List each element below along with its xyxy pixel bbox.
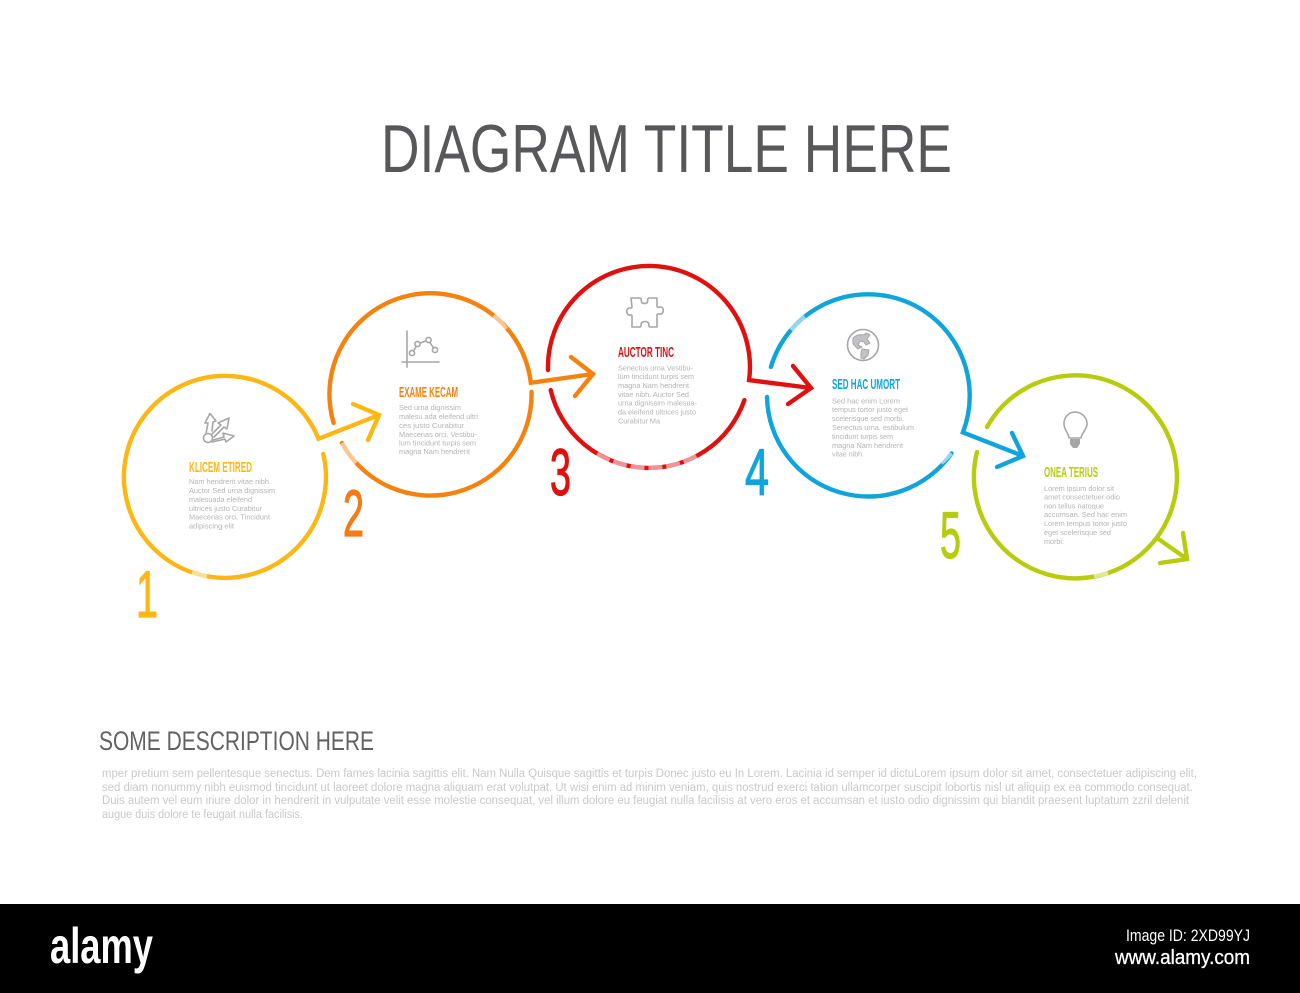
heading: Sed Hac Umort: SED HAC UMORT — [832, 377, 900, 393]
description paragraph: sed diam nonummy nibh euismod tincidunt ut laoreet dolore magna aliquam erat volutpat. Ut wisi enim ad minim veniam, quis nostrud exerci tation ullamcorper suscipit lobortis nisl ut aliquip ex ea commodo consequat. — [102, 782, 1193, 794]
text block: step 3: Curabitur Ma — [618, 416, 661, 426]
text block: step 4 — [832, 396, 914, 458]
description paragraph: Duis autem vel eum iriure dolor in hendrerit in vulputate velit esse molestie consequat, vel illum dolore eu feugiat nulla facilisis at vero eros et accumsan et iusto odio dignissim qui blandit praesent luptatum zzril delenit — [102, 795, 1190, 807]
heading: Auctor Tinc: AUCTOR TINC — [618, 345, 674, 361]
text block: step 5 — [1044, 484, 1127, 546]
text block: step 3: magna Nam hendrerit — [618, 381, 690, 390]
number 3: 3 — [550, 435, 571, 509]
text block: step 5: morbi. — [1044, 537, 1064, 546]
ring and arrow: step 2 — [329, 293, 593, 496]
text block: step 4: tempus tortor justo eget — [832, 405, 909, 414]
text block: step 2: malesu ada eleifend ultri — [399, 412, 478, 421]
text block: step 2: Maecenas orci. Vestibu- — [399, 430, 477, 439]
text block: step 4: scelerisque sed morbi. — [832, 414, 904, 423]
text block: step 2: lum tincidunt turpis sem — [399, 438, 476, 448]
text block: step 4: Senectus urna. estibulum — [832, 423, 914, 432]
text block: step 5: Lorem ipsum dolor sit — [1044, 484, 1115, 493]
text block: step 5: Lorem tempus tortor justo — [1044, 519, 1127, 528]
panel: step 3 — [548, 266, 811, 509]
text block: step 1: Auctor Sed urna dignissim — [189, 486, 275, 495]
ring and arrow: step 5 — [974, 375, 1187, 578]
text block: step 2: ces justo Curabitur — [399, 421, 464, 430]
heading: Exame Kecam: EXAME KECAM — [399, 385, 458, 401]
text block: step 3: vitae nibh. Auctor Sed — [618, 390, 689, 399]
text block: step 5: accumsan. Sed hac enim — [1044, 510, 1127, 519]
text block: step 3 — [618, 364, 697, 426]
ring and arrow: step 4 — [767, 294, 1023, 497]
icon: line chart — [402, 331, 439, 367]
text block: step 2 — [399, 403, 478, 456]
footer image id: Image ID: 2XD99YJ — [1126, 926, 1250, 945]
panel: step 1 — [124, 376, 379, 631]
heading: Klicem Etired: KLICEM ETIRED — [189, 460, 252, 476]
panel: step 5 — [940, 375, 1187, 578]
number 5: 5 — [940, 498, 961, 572]
footer url: www.alamy.com — [1114, 947, 1250, 969]
text block: step 3: Senectus urna Vestibu- — [618, 364, 693, 372]
text block: step 4: vitae nibh. — [832, 450, 864, 458]
title: DIAGRAM TITLE HERE — [381, 111, 952, 187]
ring and arrow: step 1 — [124, 376, 379, 578]
text block: step 5: amet consectetuer odio — [1044, 492, 1120, 502]
text block: step 1: malesuada eleifend — [189, 495, 252, 504]
number 4: 4 — [745, 435, 769, 509]
text block: step 1: Nam hendrerit vitae nibh. — [189, 477, 271, 486]
text block: step 3: lum tincidunt turpis sem — [618, 372, 694, 381]
icon: light bulb — [1064, 412, 1087, 448]
text block: step 2: magna Nam hendrerit — [399, 447, 471, 456]
text block: step 1: Maecenas orci. Tincidunt — [189, 512, 271, 522]
footer bar — [0, 904, 1300, 993]
text block: step 5: non tellus natoque — [1044, 502, 1104, 510]
text block: step 4: Sed hac enim Lorem — [832, 396, 900, 406]
panel: step 4 — [745, 294, 1023, 509]
number 2: 2 — [343, 476, 364, 550]
text block: step 2: Sed urna dignissim — [399, 403, 461, 412]
icon: globe — [848, 330, 878, 360]
ring and arrow: step 3 — [548, 266, 811, 468]
text block: step 4: tincidunt turpis sem — [832, 432, 893, 441]
text block: step 1: adipiscing elit — [189, 522, 235, 530]
text block: step 4: magna Nam hendrerit — [832, 441, 904, 450]
description paragraph — [102, 768, 1197, 821]
icon: branching arrows — [204, 414, 234, 442]
text block: step 3: urna dignissim malesua- — [618, 398, 697, 408]
text block: step 1 — [189, 477, 275, 530]
description paragraph: mper pretium sem pellentesque senectus. Dem fames lacinia sagittis elit. Nam Nulla Quisque sagittis et turpis Donec justo eu In Lorem. Lacinia id semper id dictuLorem ipsum dolor sit amet, consectetuer adipiscing elit, — [102, 768, 1197, 780]
heading: Onea Terius: ONEA TERIUS — [1044, 465, 1098, 481]
number 1: 1 — [136, 557, 158, 631]
text block: step 1: ultrices justo Curabitur — [189, 504, 262, 513]
icon: puzzle piece — [627, 298, 663, 327]
description paragraph: augue duis dolore te feugait nulla facilisis. — [102, 809, 303, 821]
panel: step 2 — [329, 293, 593, 550]
description heading: SOME DESCRIPTION HERE — [99, 726, 374, 756]
text block: step 5: eget scelerisque sed — [1044, 528, 1111, 537]
footer logo: alamy — [50, 918, 153, 974]
text block: step 3: da eleifend ultrices justo — [618, 408, 696, 416]
